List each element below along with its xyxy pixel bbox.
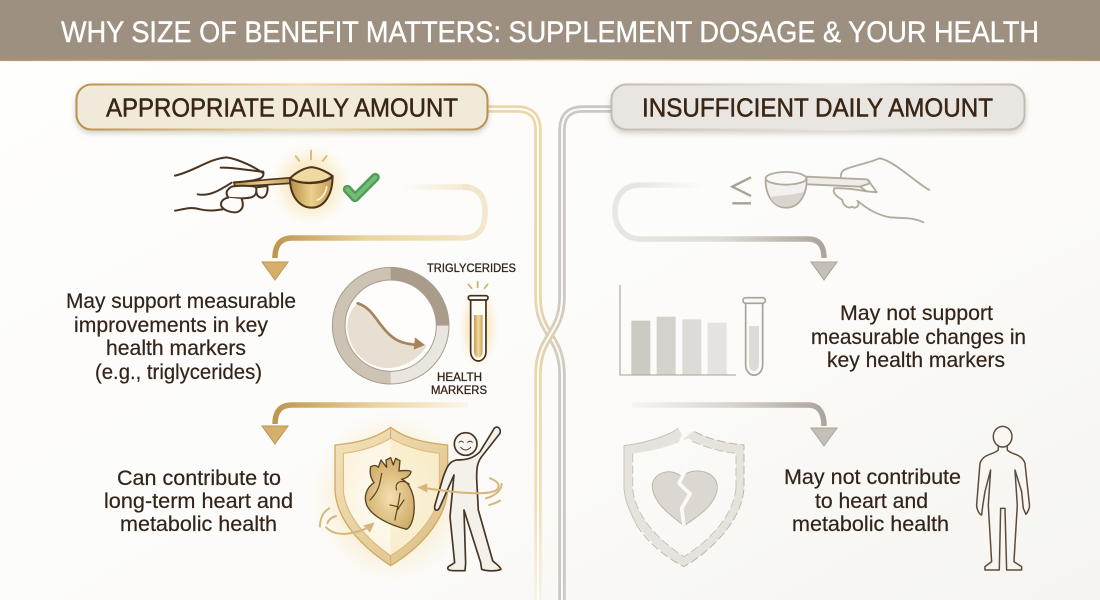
arrow: grey arrow to second outcome bbox=[632, 405, 837, 446]
badge: appropriate daily amount bbox=[76, 84, 488, 130]
text: may not contribute to heart health: May not contribute bbox=[784, 466, 961, 489]
text: may not support measurable changes: measurable changes in bbox=[811, 326, 1026, 349]
label: health markers: HEALTH bbox=[437, 370, 482, 384]
intertwined central tubes bbox=[488, 109, 611, 600]
label: health markers bbox=[431, 370, 487, 397]
text: may support measurable improvements: health markers bbox=[106, 337, 246, 360]
text: may not support measurable changes: key health markers bbox=[827, 349, 1005, 372]
icon: cracked shield with broken heart bbox=[624, 428, 744, 567]
icon: grey test tube bbox=[743, 298, 765, 375]
text: may not contribute to heart health: to heart and bbox=[815, 490, 928, 513]
icon: cheerful person with raised arm bbox=[417, 427, 502, 571]
icon: neutral standing person bbox=[977, 426, 1030, 570]
badge: appropriate daily amount: APPROPRIATE DAILY AMOUNT bbox=[106, 94, 458, 122]
bar chart: flat health markers bbox=[620, 285, 736, 375]
header banner bbox=[0, 0, 1100, 61]
icon: hand holding near-empty scoop bbox=[766, 158, 929, 222]
arrow: gold arrow to second benefit bbox=[262, 405, 468, 444]
text: may support measurable improvements bbox=[66, 290, 296, 384]
icon: less-than-or-equal symbol bbox=[732, 177, 751, 203]
label: health markers: MARKERS bbox=[431, 383, 487, 397]
icon: hand holding full golden scoop bbox=[175, 143, 352, 227]
label: triglycerides: TRIGLYCERIDES bbox=[427, 261, 516, 275]
text: may not contribute to heart health: metabolic health bbox=[792, 513, 949, 536]
text: may support measurable improvements: (e.g., triglycerides) bbox=[95, 361, 262, 384]
icon: green check mark bbox=[347, 177, 375, 198]
icon: glowing gold test tube bbox=[458, 282, 499, 370]
arrow: grey loop to first outcome bbox=[615, 185, 837, 280]
donut chart: health markers trend bbox=[332, 267, 449, 384]
text: may support measurable improvements: improvements in key bbox=[74, 314, 268, 337]
text: may not contribute to heart health bbox=[784, 466, 961, 536]
text: can contribute to heart health: Can contribute to bbox=[117, 467, 281, 490]
badge: insufficient daily amount: INSUFFICIENT DAILY AMOUNT bbox=[642, 94, 993, 122]
badge: insufficient daily amount bbox=[612, 84, 1024, 130]
arrow: gold loop to first benefit bbox=[262, 187, 485, 280]
text: can contribute to heart health: long-term heart and bbox=[104, 490, 293, 513]
text: can contribute to heart health: metabolic health bbox=[120, 513, 277, 536]
text: may support measurable improvements: May support measurable bbox=[66, 290, 296, 313]
text: may not support measurable changes: May not support bbox=[840, 302, 993, 325]
text: may not support measurable changes bbox=[811, 302, 1026, 372]
text: can contribute to heart health bbox=[104, 467, 293, 536]
icon: glowing shield with heart bbox=[311, 412, 471, 582]
